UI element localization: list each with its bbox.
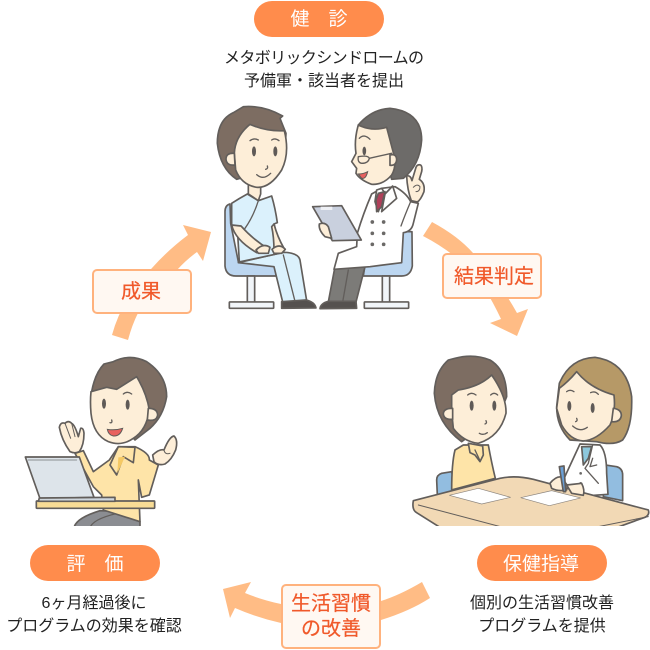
client left hand [59, 422, 84, 453]
chairs [437, 465, 623, 501]
label box: lifestyle improvement: の改善 [301, 617, 361, 640]
label box: lifestyle improvement [282, 585, 380, 648]
doctor coat [334, 186, 418, 269]
text block: evaluation description: プログラムの効果を確認 [6, 617, 182, 635]
text block: guidance description [470, 594, 614, 635]
client right hand [153, 436, 177, 465]
heading pill: checkup: 健 診 [290, 8, 348, 30]
counselor hands and pen [550, 466, 584, 495]
client torso [452, 443, 495, 490]
arrow: results to guidance [423, 222, 528, 336]
doctor hand with raised finger [407, 165, 424, 202]
client head [434, 356, 507, 443]
laptop [25, 457, 115, 501]
counselor coat [563, 444, 608, 496]
label box: outcome: 成果 [121, 280, 161, 303]
text block: guidance description: 個別の生活習慣改善 [470, 594, 614, 612]
doctor chair [363, 232, 412, 308]
text block: evaluation description [6, 594, 182, 635]
counselor hair back [557, 357, 632, 443]
illustration: client reporting with laptop [25, 357, 177, 530]
clipboard [313, 206, 361, 241]
heading pill: checkup [254, 1, 384, 37]
chair and pants [74, 510, 141, 526]
client torso [75, 447, 158, 522]
illustration: patient and doctor consultation [217, 106, 424, 309]
arrow: lifestyle improvement to evaluation [223, 582, 430, 628]
client head [90, 357, 167, 444]
patient legs [238, 252, 316, 308]
label box: results: 結果判定 [454, 265, 534, 288]
text block: checkup description [224, 49, 424, 90]
patient torso [232, 183, 285, 262]
heading pill: evaluation: 評 価 [66, 553, 124, 575]
counselor face [557, 372, 621, 441]
heading pill: guidance [477, 545, 607, 581]
heading pill: guidance: 保健指導 [503, 553, 579, 575]
text block: evaluation description: 6ヶ月経過後に [42, 594, 146, 612]
text block: guidance description: プログラムを提供 [478, 617, 606, 635]
label box: lifestyle improvement: 生活習慣 [291, 592, 371, 615]
patient head [217, 106, 287, 187]
arrow: outcome back to checkup [112, 225, 211, 340]
table [412, 476, 650, 526]
desk [36, 501, 155, 508]
text block: checkup description: メタボリックシンドロームの [224, 49, 424, 67]
label box: results [443, 254, 541, 298]
text block: checkup description: 予備軍・該当者を提出 [244, 72, 404, 90]
doctor legs and shoes [320, 267, 365, 309]
illustration: client and female counselor at table [413, 356, 649, 540]
heading pill: evaluation [30, 545, 160, 581]
patient chair [225, 204, 276, 308]
label box: outcome [93, 270, 191, 313]
doctor head [352, 108, 422, 184]
